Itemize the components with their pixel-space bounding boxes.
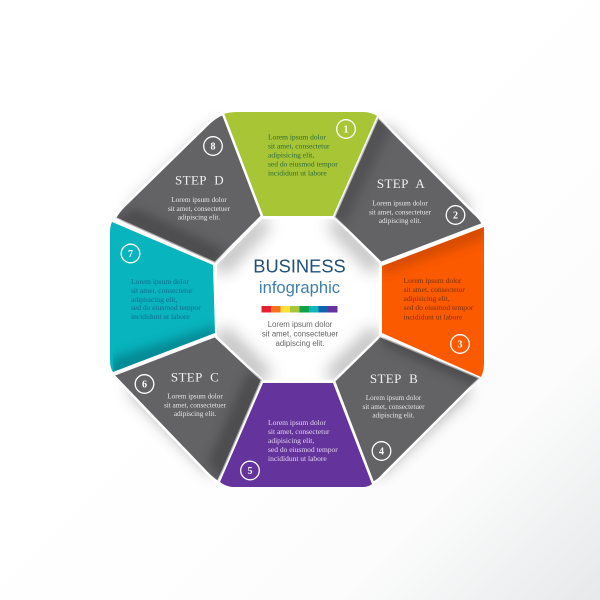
text: segment 7: sit amet, consectetur [131, 286, 193, 295]
text: segment 7: incididunt ut labore [131, 312, 190, 321]
center description: adipiscing elit. [276, 339, 324, 348]
badge 1: 1 [344, 124, 348, 136]
text: segment 1: sed do eiusmod tempor [268, 160, 338, 168]
text: STEP C: adipiscing elit. [174, 410, 216, 418]
text: segment 1: incididunt ut labore [268, 168, 327, 178]
badge 5 [241, 461, 259, 480]
outer shadows [128, 124, 470, 476]
badge 4 [372, 442, 391, 460]
heading: STEP D: STEP D [175, 172, 224, 188]
text: segment 1: sit amet, consectetur [268, 142, 330, 150]
segment 3: orange [382, 220, 486, 377]
heading: STEP A: STEP A [377, 176, 425, 191]
segment 4: grey STEP B [334, 328, 484, 483]
text: segment 5: sed do eiusmod tempor [268, 445, 338, 454]
text: segment 5: sit amet, consectetur [268, 427, 330, 436]
text: segment 5: Lorem ipsum dolor [268, 418, 326, 427]
text: segment 5: incididunt ut labore [268, 454, 327, 463]
segment 2: grey STEP A [328, 110, 483, 263]
segment 5: purple [220, 383, 372, 487]
badge 3 [451, 335, 469, 353]
text: STEP C: Lorem ipsum dolor [167, 392, 223, 400]
heading: STEP B: STEP B [370, 371, 418, 386]
badge 8: 8 [210, 142, 216, 152]
center description: Lorem ipsum dolor [268, 320, 333, 329]
title: BUSINESS: BUSINESS [253, 256, 346, 276]
rainbow bar [262, 306, 338, 312]
text: segment 3: incididunt ut labore [404, 312, 463, 322]
segment 6: grey STEP C [113, 336, 268, 484]
badge 3: 3 [458, 340, 462, 350]
text: segment 3: sed do eiusmod tempor [404, 303, 474, 312]
segment 1: green [224, 112, 377, 216]
badge 1 [337, 120, 355, 138]
text: segment 5: adipisicing elit, [268, 436, 314, 445]
text: segment 7: sed do eiusmod tempor [131, 303, 201, 312]
text: segment 7: adipisicing elit, [131, 295, 177, 304]
text: segment 3: Lorem ipsum dolor [404, 276, 462, 285]
badge 7: 7 [128, 249, 133, 260]
center description: sit amet, consectetuer [262, 330, 339, 338]
text: STEP D: adipiscing elit. [178, 214, 220, 222]
badge 4: 4 [379, 446, 384, 458]
text: STEP C: sit amet, consectetuer [164, 402, 227, 410]
segment 8: grey STEP D [112, 114, 262, 268]
text: segment 3: sit amet, consectetur [404, 285, 465, 294]
badge 2: 2 [453, 210, 458, 222]
text: STEP A: adipiscing elit. [379, 217, 421, 225]
text: segment 1: Lorem ipsum dolor [268, 132, 326, 142]
text: segment 3: adipisicing elit, [404, 294, 450, 303]
text: segment 1: adipisicing elit, [268, 150, 314, 160]
badge 5: 5 [248, 466, 252, 477]
badge 6: 6 [142, 380, 147, 390]
text: segment 7: Lorem ipsum dolor [131, 277, 189, 286]
segment 7: teal [110, 222, 216, 380]
heading: STEP C: STEP C [171, 370, 219, 384]
text: STEP D: Lorem ipsum dolor [171, 196, 227, 204]
text: STEP B: Lorem ipsum dolor [366, 394, 422, 402]
text: STEP D: sit amet, consectetuer [168, 205, 231, 213]
subtitle: infographic: infographic [259, 278, 340, 297]
badge 7 [121, 244, 140, 263]
badge 2 [446, 206, 465, 224]
text: STEP B: adipiscing elit. [372, 412, 415, 420]
text: STEP A: Lorem ipsum dolor [372, 200, 428, 208]
text: STEP A: sit amet, consectetuer [369, 208, 432, 216]
badge 8 [204, 137, 222, 155]
text: STEP B: sit amet, consectetuer [362, 403, 425, 411]
center panel [217, 219, 379, 380]
badge 6 [135, 375, 154, 393]
